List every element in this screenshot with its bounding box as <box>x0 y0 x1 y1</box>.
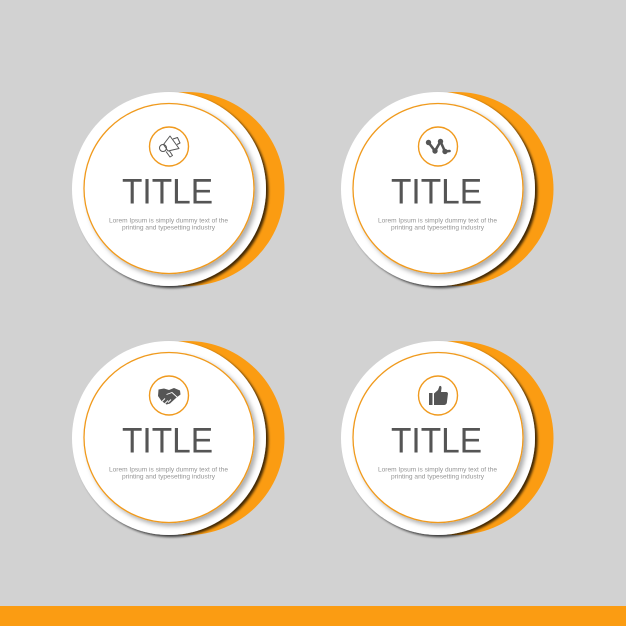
icon: thumbs up <box>418 376 458 415</box>
body text: printing and typesetting industry <box>391 224 485 231</box>
heading: TITLE <box>122 421 213 460</box>
orange back circle <box>360 92 554 286</box>
orange back circle <box>360 341 554 535</box>
heading: TITLE <box>391 172 482 211</box>
icon: handshake <box>150 376 188 415</box>
body text: Lorem Ipsum is simply dummy text of the <box>109 467 229 474</box>
heading: TITLE <box>122 172 213 211</box>
orange back circle <box>90 341 284 535</box>
inner circle <box>353 352 523 522</box>
body text <box>109 467 229 480</box>
inner circle <box>84 352 254 522</box>
panel: bottom right <box>341 341 554 535</box>
body text: Lorem Ipsum is simply dummy text of the <box>378 467 498 474</box>
inner circle <box>353 104 523 274</box>
body text: Lorem Ipsum is simply dummy text of the <box>378 218 498 225</box>
bottom orange bar <box>0 606 626 626</box>
orange back circle <box>90 92 284 286</box>
body text <box>378 218 498 231</box>
body text <box>378 467 498 480</box>
body text: printing and typesetting industry <box>122 473 216 480</box>
body text: printing and typesetting industry <box>122 224 216 231</box>
icon: megaphone <box>150 127 188 166</box>
panel: bottom left <box>72 341 284 535</box>
heading: TITLE <box>391 421 482 460</box>
inner circle <box>84 104 254 274</box>
white circle <box>341 92 535 286</box>
icon: zigzag line <box>418 127 458 166</box>
body text: Lorem Ipsum is simply dummy text of the <box>109 218 229 225</box>
white circle <box>341 341 535 535</box>
white circle <box>72 92 266 286</box>
panel: top left <box>72 92 284 286</box>
body text: printing and typesetting industry <box>391 473 485 480</box>
body text <box>109 218 229 231</box>
white circle <box>72 341 266 535</box>
panel: top right <box>341 92 554 286</box>
